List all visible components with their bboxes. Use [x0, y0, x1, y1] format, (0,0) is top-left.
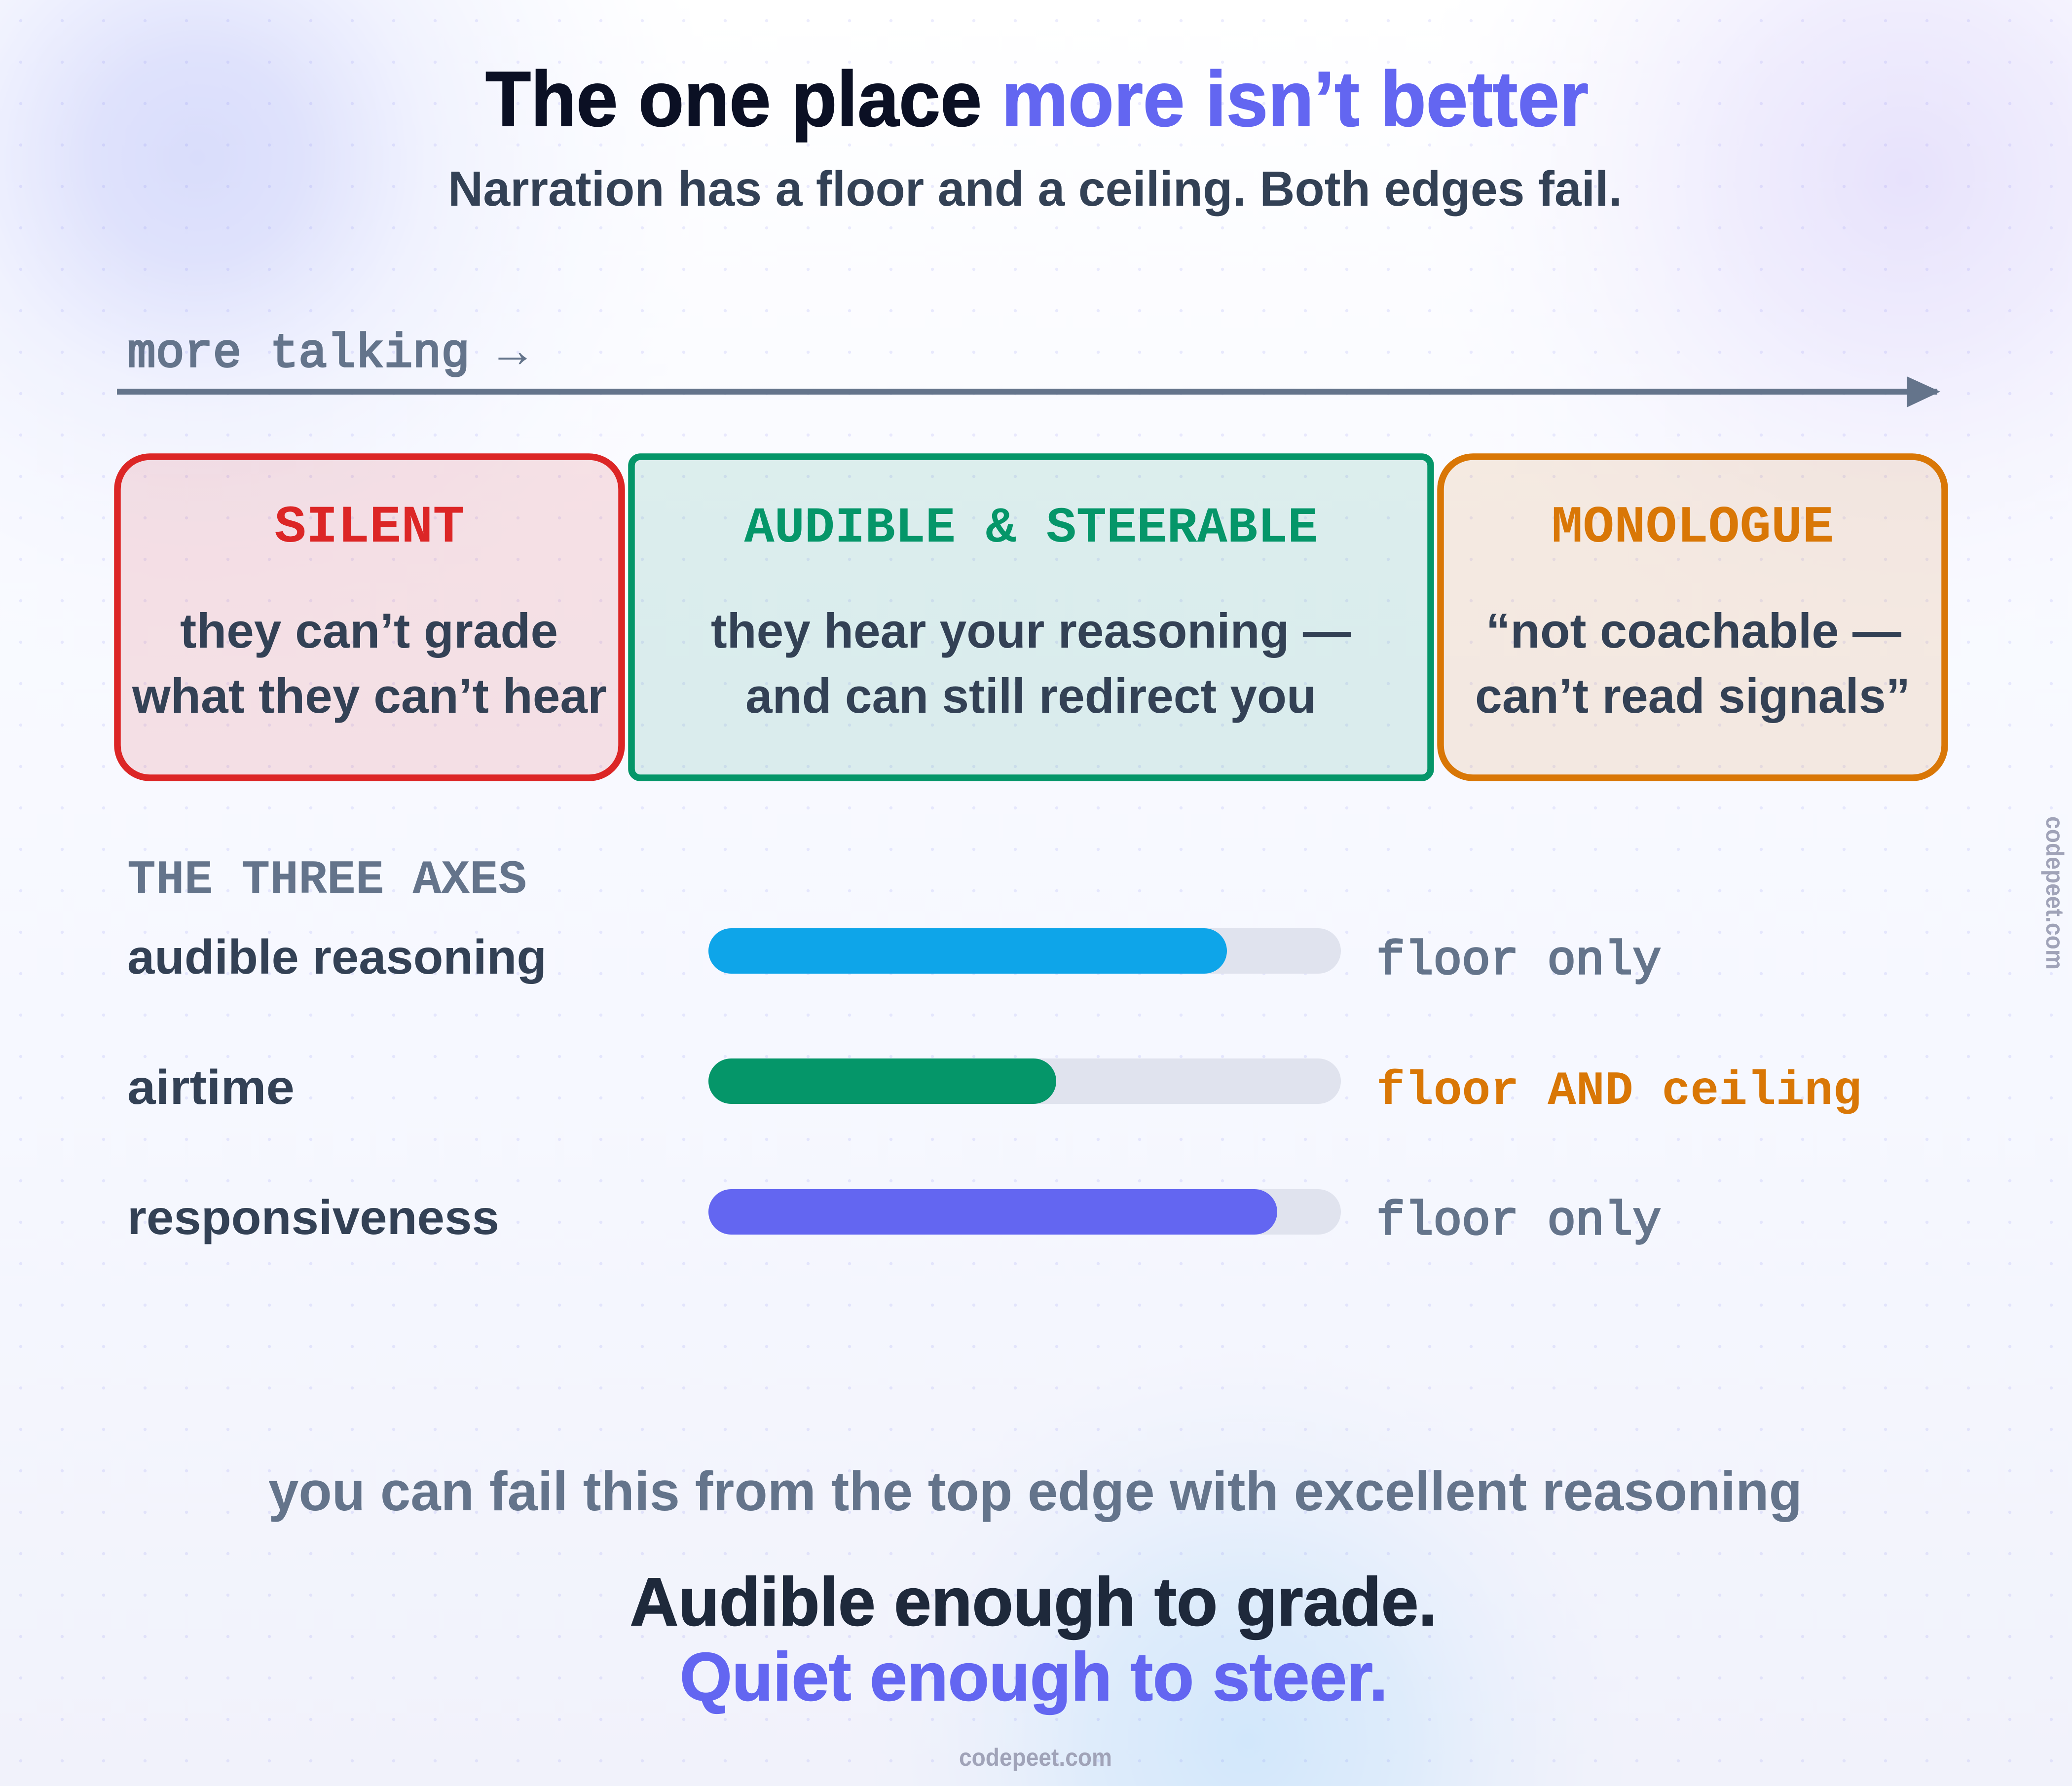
heading: the three axes: THE THREE AXES	[127, 853, 527, 907]
title: accent part: more isn’t better	[1001, 56, 1589, 143]
label: responsiveness: responsiveness	[127, 1190, 499, 1244]
heading: audible and steerable: AUDIBLE & STEERABLE	[744, 500, 1318, 557]
text: monologue description: can’t read signals”	[1475, 668, 1910, 723]
subtitle: Narration has a floor and a ceiling. Both edges fail.	[448, 161, 1622, 217]
heading: monologue: MONOLOGUE	[1552, 498, 1834, 557]
title: dark part: The one place	[485, 56, 982, 143]
text: audible description: they hear your reasoning —	[711, 603, 1351, 658]
arrow: axis	[117, 376, 1940, 407]
note: floor only: floor only	[1376, 934, 1661, 988]
note: floor and ceiling: floor AND ceiling	[1376, 1064, 1861, 1118]
note: floor only: floor only	[1376, 1195, 1661, 1248]
axis label: more talking: more talking →	[127, 327, 527, 381]
title	[485, 56, 1589, 143]
callout: fail from the top edge: you can fail this from the top edge with excellent reasoning	[268, 1460, 1802, 1522]
takeaway: line one: Audible enough to grade.	[630, 1564, 1437, 1640]
text: monologue description	[1475, 603, 1910, 723]
takeaway	[630, 1564, 1437, 1715]
takeaway: line two: Quiet enough to steer.	[680, 1639, 1388, 1715]
heading: silent: SILENT	[274, 498, 465, 558]
label: airtime: airtime	[127, 1060, 295, 1114]
row: airtime	[127, 1058, 1861, 1118]
text: audible description	[711, 603, 1351, 723]
text: audible description: and can still redirect you	[745, 668, 1316, 723]
watermark: codepeet vertical: codepeet.com	[2041, 816, 2069, 970]
text: silent description	[132, 603, 607, 723]
panel: silent	[117, 457, 622, 778]
text: silent description: what they can’t hear	[132, 668, 607, 723]
panel: monologue	[1441, 457, 1945, 778]
bar: audible reasoning	[708, 928, 1341, 974]
bar: airtime	[708, 1058, 1341, 1104]
bar: responsiveness	[708, 1189, 1341, 1235]
text: monologue description: “not coachable —	[1486, 603, 1901, 658]
label: audible reasoning: audible reasoning	[127, 930, 547, 984]
footer: codepeet: codepeet.com	[959, 1744, 1112, 1771]
row: audible reasoning	[127, 928, 1661, 988]
text: silent description: they can’t grade	[180, 603, 558, 658]
row: responsiveness	[127, 1189, 1661, 1248]
panel: audible and steerable	[631, 457, 1431, 778]
